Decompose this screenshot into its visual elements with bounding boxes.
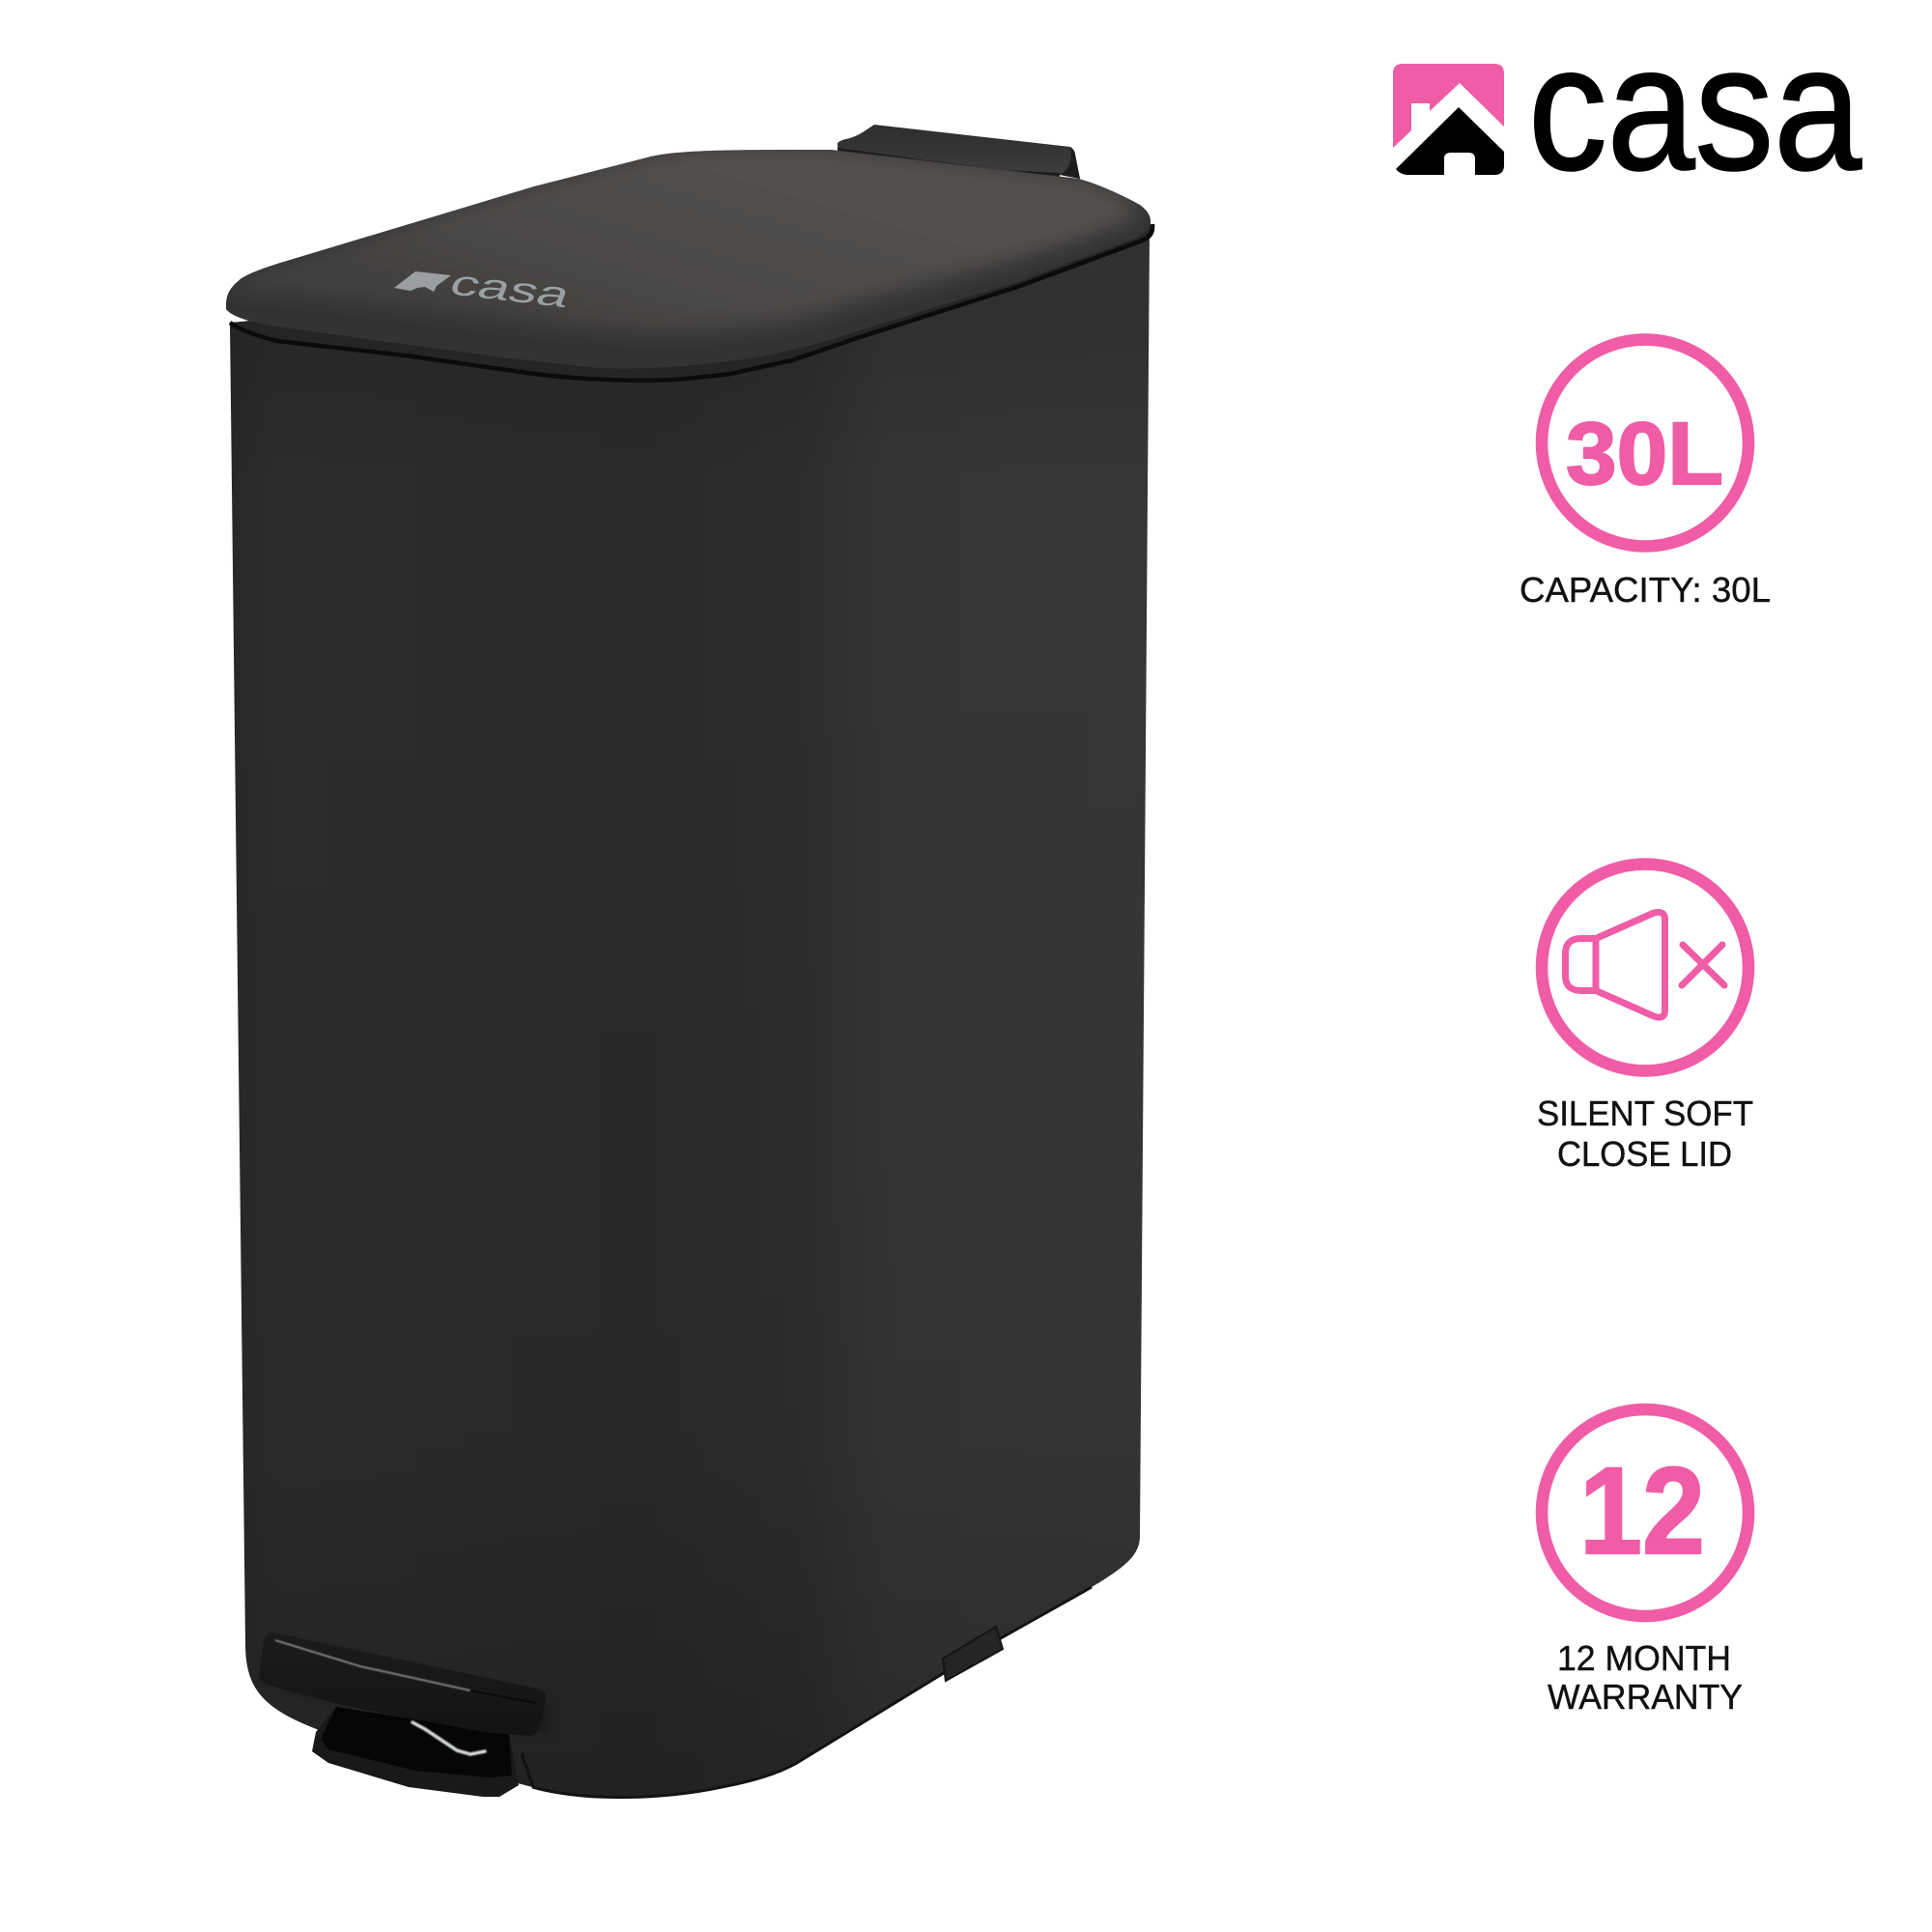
logo wordmark: casa xyxy=(1528,8,1862,207)
label: WARRANTY xyxy=(1548,1677,1743,1717)
pedal underside xyxy=(312,1707,533,1797)
infographic canvas xyxy=(226,64,1862,1799)
feature: silent close xyxy=(1537,864,1753,1174)
label: SILENT SOFT xyxy=(1537,1094,1753,1133)
logo icon xyxy=(1393,64,1504,175)
feature: warranty xyxy=(1542,1409,1748,1717)
lid xyxy=(226,145,1151,368)
label: CLOSE LID xyxy=(1557,1134,1732,1174)
feature: capacity xyxy=(1520,340,1771,610)
lid logo xyxy=(394,263,577,315)
bin body xyxy=(230,232,1150,1798)
lid rim and groove xyxy=(230,224,1152,381)
label xyxy=(1548,1638,1743,1717)
product: black pedal bin xyxy=(226,125,1152,1798)
badge: 12 xyxy=(1542,1409,1748,1616)
icon: muted speaker xyxy=(1542,864,1748,1070)
badge: 30L xyxy=(1542,340,1748,547)
badge: 12: 12 xyxy=(1579,1442,1705,1580)
pedal xyxy=(259,1633,551,1736)
label: 12 MONTH xyxy=(1557,1638,1731,1678)
badge: 30L: 30L xyxy=(1566,405,1723,503)
pedal spring xyxy=(412,1722,485,1754)
lid logo word: casa xyxy=(444,263,577,315)
lid logo mark xyxy=(394,271,451,292)
label: CAPACITY: 30L xyxy=(1520,570,1771,610)
foot clip xyxy=(943,1627,1003,1681)
label xyxy=(1537,1094,1753,1174)
hinge tab xyxy=(838,125,1080,179)
brand logo xyxy=(1393,8,1862,207)
